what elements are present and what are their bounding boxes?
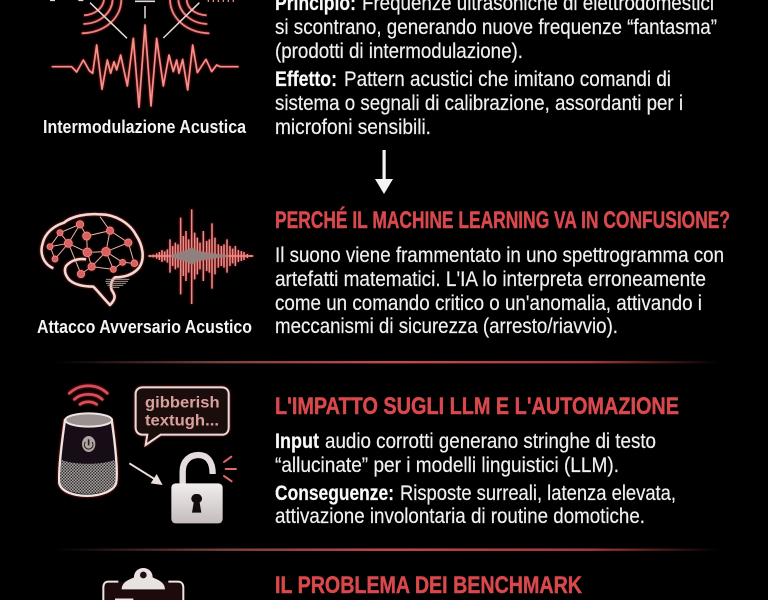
text block: input e conseguenze (275, 429, 676, 528)
text block: spettrogramma: artefatti matematici. L'IA lo interpreta erroneamente (275, 267, 706, 291)
sound arcs right (170, 0, 209, 33)
alert ticks (224, 457, 236, 481)
arrow to lock (129, 463, 163, 485)
text block: spettrogramma (275, 243, 724, 338)
icon: brain and adversarial waveform (42, 209, 253, 305)
brain outline (42, 214, 143, 305)
text block: principio ed effetto: si scontrano, generando nuove frequenze “fantasma” (275, 15, 717, 39)
text block: principio ed effetto: Pattern acustici che imitano comandi di (344, 67, 671, 91)
icon: clipboard (103, 568, 183, 600)
text block: principio ed effetto: microfoni sensibili. (275, 115, 431, 139)
text block: input e conseguenze: “allucinate” per i modelli linguistici (LLM). (275, 453, 619, 477)
pointer lines (50, 0, 199, 38)
icon: acoustic intermodulation waveform (50, 0, 239, 107)
brain network edges (50, 217, 134, 274)
speech bubble (136, 387, 229, 445)
top ticks (208, 0, 233, 2)
speaker mesh (60, 460, 116, 494)
cerebellum (105, 279, 129, 287)
text block: input e conseguenze: Risposte surreali, latenza elevata, (400, 481, 676, 505)
sound arcs left (82, 0, 121, 33)
text block: input e conseguenze: Input (275, 429, 319, 453)
text block: principio ed effetto: (prodotti di intermodulazione). (275, 39, 523, 63)
spectrum waveform (148, 209, 253, 304)
speech bubble: gibberish (145, 395, 220, 412)
label: Attacco Avversario Acustico: Attacco Avversario Acustico (37, 316, 252, 337)
label: Intermodulazione Acustica: Intermodulazione Acustica (43, 116, 247, 137)
text block: input e conseguenze: attivazione involontaria di routine domotiche. (275, 504, 645, 528)
text block: spettrogramma: meccanismi di sicurezza (arresto/riavvio). (275, 314, 618, 338)
speaker body (59, 420, 117, 496)
speech bubble: textugh... (145, 412, 219, 429)
brain nodes (47, 221, 138, 278)
waveform line (52, 25, 239, 107)
arrow: down (375, 150, 393, 194)
wifi arcs (69, 386, 107, 404)
open padlock (171, 455, 223, 523)
text block: principio ed effetto: sistema o segnali di calibrazione, assordanti per i (275, 91, 683, 115)
icon: smart speaker, speech bubble and open lock (59, 386, 236, 523)
text block: principio ed effetto: Effetto: (275, 67, 337, 91)
text block: input e conseguenze: Conseguenze: (275, 481, 394, 505)
heading: il problema dei benchmark: IL PROBLEMA DEI BENCHMARK (275, 572, 582, 599)
text block: input e conseguenze: audio corrotti generano stringhe di testo (325, 429, 656, 453)
speaker top (65, 413, 112, 427)
speaker button (82, 436, 95, 452)
text block: spettrogramma: come un comando critico o un'anomalia, attivando i (275, 291, 702, 315)
text block: principio ed effetto (275, 0, 717, 139)
heading: impatto su LLM: L'IMPATTO SUGLI LLM E L'AUTOMAZIONE (275, 393, 679, 420)
